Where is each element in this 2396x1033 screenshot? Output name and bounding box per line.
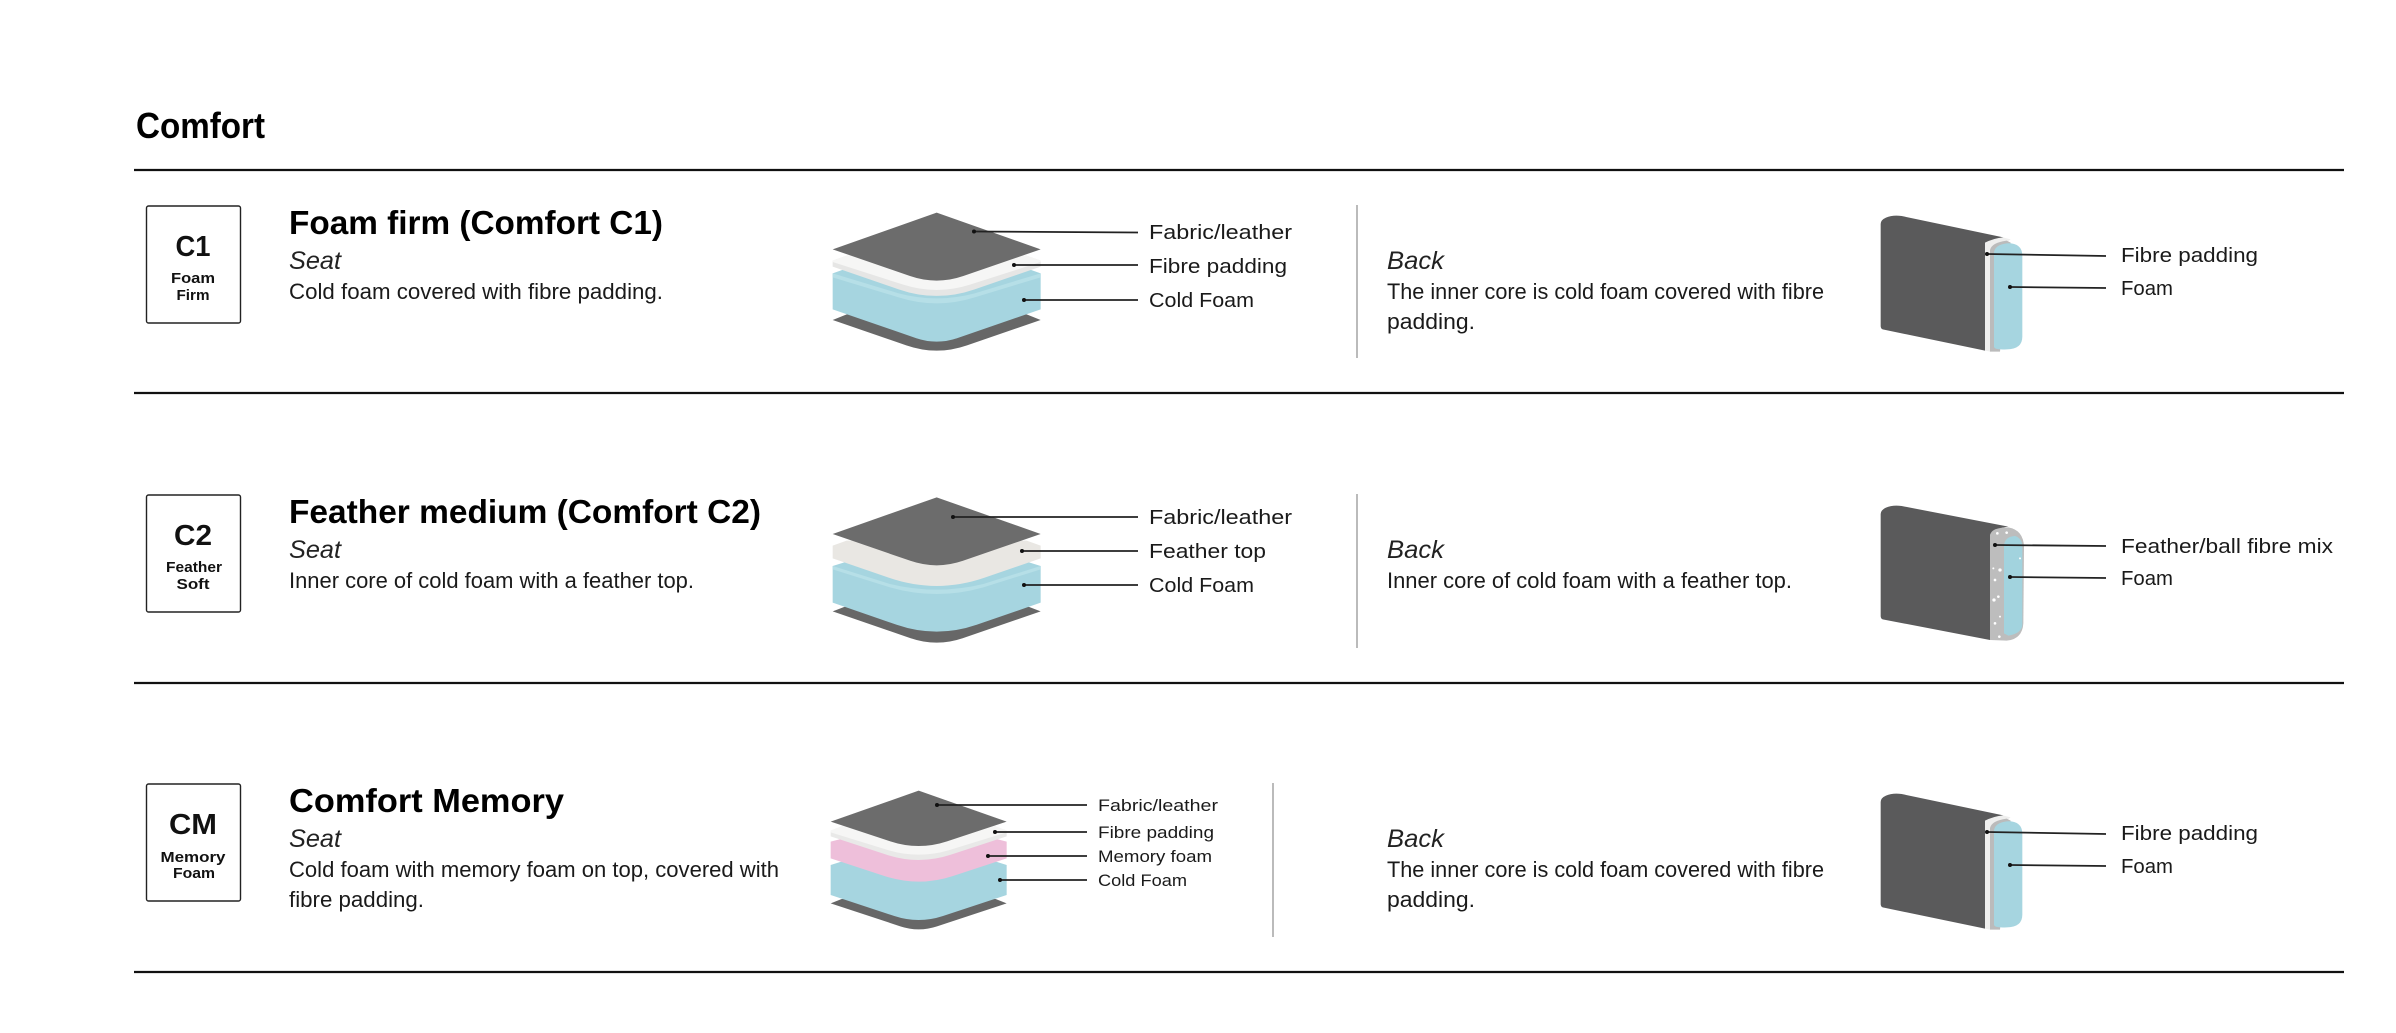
leader lines and seat labels C2 bbox=[951, 507, 1292, 597]
seat description bbox=[289, 825, 779, 912]
back description CM: The inner core is cold foam covered with fibre bbox=[1387, 857, 1824, 882]
back description C2: Back bbox=[1387, 536, 1446, 564]
badge: CM memory foam: CM bbox=[169, 809, 217, 841]
badge: C1 foam firm: Foam bbox=[171, 270, 215, 287]
seat description: Cold foam covered with fibre padding. bbox=[289, 279, 663, 304]
back description CM bbox=[1387, 825, 1824, 912]
back description C1: The inner core is cold foam covered with fibre bbox=[1387, 279, 1824, 304]
badge: C2 feather soft: Feather bbox=[166, 559, 222, 576]
leader lines and seat labels C2: Feather top bbox=[1149, 541, 1266, 563]
leader lines and back labels C2: Foam bbox=[2121, 568, 2173, 590]
leader lines and seat labels CM: Memory foam bbox=[1098, 847, 1212, 866]
leader lines and back labels C2 bbox=[1993, 536, 2333, 590]
diagram: back cushion CM bbox=[1881, 794, 2022, 930]
badge: C2 feather soft: C2 bbox=[174, 520, 212, 552]
seat description: Cold foam with memory foam on top, covered with bbox=[289, 857, 779, 882]
back description C2 bbox=[1387, 536, 1792, 593]
leader lines and back labels CM bbox=[1985, 823, 2258, 878]
seat description bbox=[289, 247, 663, 304]
back description CM: Back bbox=[1387, 825, 1446, 853]
badge: CM memory foam bbox=[146, 784, 240, 901]
leader lines and seat labels C2: Fabric/leather bbox=[1149, 507, 1292, 529]
back description C1: Back bbox=[1387, 247, 1446, 275]
seat description: Seat bbox=[289, 825, 342, 853]
leader lines and back labels C2: Feather/ball fibre mix bbox=[2121, 536, 2333, 558]
leader lines and seat labels CM: Fibre padding bbox=[1098, 823, 1214, 842]
panel: comfort C2 bbox=[146, 493, 2333, 648]
diagram: back cushion C2 bbox=[1881, 506, 2024, 641]
panel: comfort memory bbox=[146, 782, 2258, 937]
leader lines and seat labels CM bbox=[935, 796, 1218, 890]
leader lines and seat labels CM: Fabric/leather bbox=[1098, 796, 1218, 815]
panel: comfort C1 bbox=[146, 204, 2258, 358]
diagram: seat layers CM bbox=[831, 791, 1007, 929]
title: Comfort bbox=[136, 105, 265, 146]
leader lines and seat labels CM: Cold Foam bbox=[1098, 871, 1187, 890]
leader lines and seat labels C1: Cold Foam bbox=[1149, 290, 1254, 312]
badge: CM memory foam: Foam bbox=[173, 865, 215, 882]
back description C1 bbox=[1387, 247, 1824, 334]
badge: C1 foam firm: Firm bbox=[176, 287, 210, 304]
seat description: Inner core of cold foam with a feather top. bbox=[289, 568, 694, 593]
leader lines and back labels C1: Fibre padding bbox=[2121, 245, 2258, 267]
leader lines and seat labels C2: Cold Foam bbox=[1149, 575, 1254, 597]
badge: C2 feather soft: Soft bbox=[176, 576, 210, 593]
leader lines and back labels C1 bbox=[1985, 245, 2258, 300]
seat description: Seat bbox=[289, 536, 342, 564]
leader lines and back labels CM: Fibre padding bbox=[2121, 823, 2258, 845]
seat description: fibre padding. bbox=[289, 887, 424, 912]
leader lines and back labels CM: Foam bbox=[2121, 856, 2173, 878]
diagram: back cushion C1 bbox=[1881, 216, 2022, 352]
diagram: seat layers C2 bbox=[833, 497, 1041, 643]
badge: C1 foam firm: C1 bbox=[176, 231, 210, 263]
heading: feather medium: Feather medium (Comfort C2) bbox=[289, 493, 761, 530]
heading: comfort memory: Comfort Memory bbox=[289, 782, 565, 819]
back description CM: padding. bbox=[1387, 887, 1475, 912]
heading: foam firm: Foam firm (Comfort C1) bbox=[289, 204, 663, 241]
badge: C1 foam firm bbox=[146, 206, 240, 323]
badge: CM memory foam: Memory bbox=[160, 849, 226, 866]
badge: C2 feather soft bbox=[146, 495, 240, 612]
leader lines and seat labels C1 bbox=[972, 222, 1292, 312]
seat description bbox=[289, 536, 694, 593]
diagram: seat layers C1 bbox=[833, 213, 1041, 351]
leader lines and seat labels C1: Fabric/leather bbox=[1149, 222, 1292, 244]
leader lines and back labels C1: Foam bbox=[2121, 278, 2173, 300]
leader lines and seat labels C1: Fibre padding bbox=[1149, 256, 1287, 278]
back description C2: Inner core of cold foam with a feather top. bbox=[1387, 568, 1792, 593]
back description C1: padding. bbox=[1387, 309, 1475, 334]
seat description: Seat bbox=[289, 247, 342, 275]
